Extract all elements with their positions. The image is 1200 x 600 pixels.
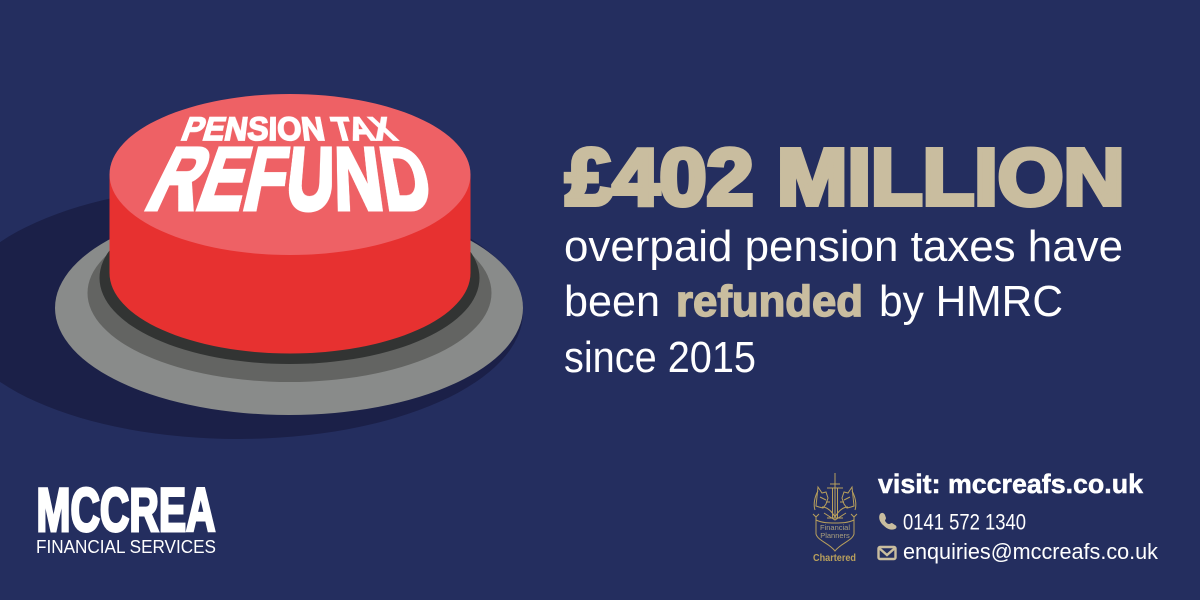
description text: refunded xyxy=(676,277,863,326)
shadow xyxy=(0,185,523,439)
text: PENSION TAX xyxy=(176,111,402,148)
icon: envelope xyxy=(878,547,896,559)
phone number: 0141 572 1340 xyxy=(903,510,1026,534)
crest: Chartered Financial Planners: Chartered xyxy=(813,552,856,564)
description text xyxy=(564,222,1123,382)
description text: since 2015 xyxy=(564,333,756,382)
base disc xyxy=(55,201,523,415)
logo: McCrea Financial Services xyxy=(36,476,216,557)
website: visit: mccreafs.co.uk xyxy=(878,469,1144,499)
crest: Chartered Financial Planners: Financial xyxy=(820,523,850,532)
logo: McCrea Financial Services: MCCREA xyxy=(36,476,216,544)
logo: McCrea Financial Services: FINANCIAL SERVICES xyxy=(36,537,216,557)
icon: phone xyxy=(879,513,896,530)
headline figure: £402 MILLION xyxy=(566,132,1124,222)
text: REFUND xyxy=(130,133,444,233)
middle ring xyxy=(88,204,492,382)
button top xyxy=(110,94,470,255)
description text: by HMRC xyxy=(879,277,1063,326)
black ring xyxy=(100,192,480,364)
description text: overpaid pension taxes have xyxy=(564,222,1123,271)
description text: been xyxy=(564,277,660,326)
crest: Chartered Financial Planners xyxy=(813,473,857,564)
button side xyxy=(110,175,470,354)
crest: Chartered Financial Planners: Planners xyxy=(820,531,850,540)
email: enquiries@mccreafs.co.uk xyxy=(903,539,1159,564)
